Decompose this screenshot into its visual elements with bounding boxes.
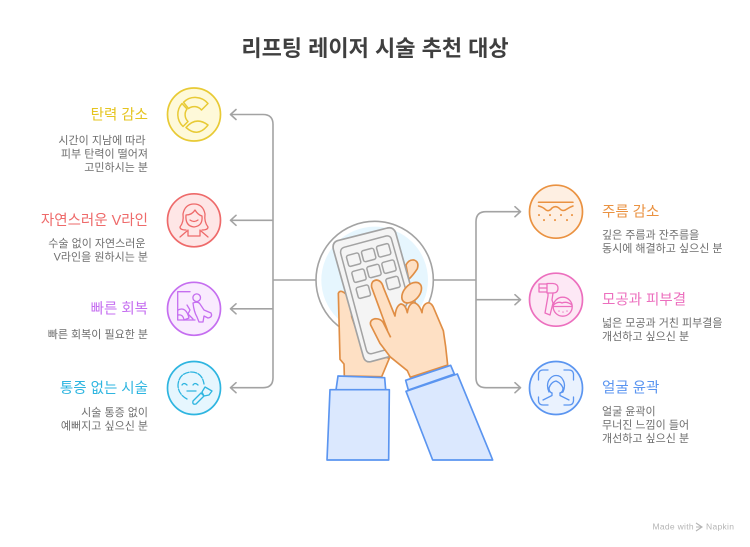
description: 피부 탄력이 떨어져 — [61, 148, 148, 160]
description: 예뻐지고 싶으신 분 — [61, 420, 148, 432]
watermark: Made with Napkin: Made with — [652, 522, 694, 532]
description: 깊은 주름과 잔주름을 — [602, 228, 699, 242]
item: 주름 감소 — [602, 204, 722, 255]
item: 탄력 감소 — [58, 106, 148, 174]
icon: elasticity — [168, 88, 220, 141]
heading: 자연스러운 V라인 — [41, 212, 148, 229]
right connector arrows — [433, 207, 520, 393]
item: 모공과 피부결 — [602, 292, 722, 343]
heading: 탄력 감소 — [91, 106, 148, 124]
phone buttons — [346, 243, 401, 299]
description: 개선하고 싶으신 분 — [602, 431, 689, 445]
item: 자연스러운 V라인 — [41, 212, 148, 264]
item: 빠른 회복 — [48, 300, 148, 341]
icon: recovery — [168, 282, 220, 335]
upper finger — [398, 279, 425, 307]
heading: 모공과 피부결 — [602, 292, 686, 308]
right sleeve — [406, 365, 493, 460]
description: 시간이 지남에 따라 — [58, 134, 146, 147]
watermark: Made with Napkin: Napkin — [706, 522, 734, 532]
heading: 통증 없는 시술 — [60, 380, 148, 397]
item: 통증 없는 시술 — [60, 380, 148, 432]
icon: painless — [168, 362, 220, 414]
description: 얼굴 윤곽이 — [602, 404, 656, 418]
icon: woman face — [168, 194, 220, 247]
heading: 빠른 회복 — [91, 300, 148, 318]
description: 빠른 회복이 필요한 분 — [48, 328, 148, 341]
left connector arrows — [230, 110, 316, 393]
backdrop circle — [316, 221, 433, 339]
icon: skin device — [530, 273, 582, 326]
central illustration: hands holding phone — [316, 221, 493, 460]
heading: 주름 감소 — [602, 204, 659, 220]
item: 얼굴 윤곽 — [602, 380, 689, 445]
heading: 얼굴 윤곽 — [602, 380, 659, 396]
phone — [333, 228, 417, 362]
back finger — [406, 260, 418, 279]
icon: wrinkles — [530, 185, 582, 238]
description: 동시에 해결하고 싶으신 분 — [602, 241, 722, 255]
description: 넓은 모공과 거친 피부결을 — [602, 316, 722, 330]
description: 고민하시는 분 — [84, 160, 148, 174]
description: 무너진 느낌이 들어 — [602, 418, 689, 432]
left sleeve — [327, 376, 389, 460]
left hand — [338, 291, 389, 377]
title: 리프팅 레이저 시술 추천 대상 — [241, 36, 509, 61]
right hand — [370, 280, 448, 377]
icon: napkin logo — [696, 523, 702, 531]
icon: face contour — [530, 362, 582, 414]
description: 수술 없이 자연스러운 — [48, 237, 146, 250]
watermark: Made with Napkin — [652, 522, 734, 532]
description: V라인을 원하시는 분 — [54, 250, 148, 264]
description: 개선하고 싶으신 분 — [602, 329, 689, 343]
description: 시술 통증 없이 — [81, 406, 148, 419]
